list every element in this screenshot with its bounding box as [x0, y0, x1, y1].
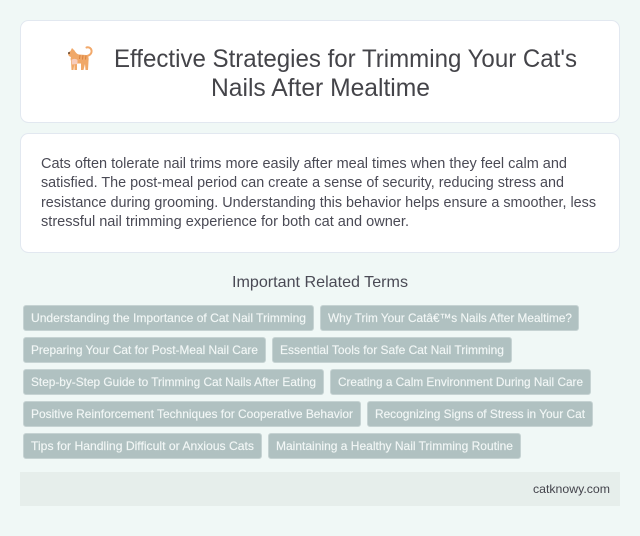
panel: introduction text: stressful nail trimming experience for both cat and owner. — [41, 214, 409, 230]
title: Effective Strategies for Trimming Your Cat's — [114, 45, 577, 73]
tag — [24, 338, 266, 362]
tag — [24, 402, 360, 426]
tag: Recognizing Signs of Stress in Your Cat — [375, 407, 586, 421]
tag — [330, 370, 590, 394]
heading: related terms: Important Related Terms — [232, 274, 408, 291]
tag — [320, 306, 578, 330]
tag — [24, 434, 262, 458]
tag — [272, 338, 512, 362]
tag: Why Trim Your Catâ€™s Nails After Mealtime? — [328, 311, 572, 325]
tag: Step-by-Step Guide to Trimming Cat Nails After Eating — [31, 375, 316, 389]
footer: catknowy.com — [533, 482, 610, 496]
tag: Positive Reinforcement Techniques for Cooperative Behavior — [31, 407, 353, 421]
panel: introduction text: satisfied. The post-meal period can create a sense of security, reducing stress and — [41, 175, 564, 191]
tag: Understanding the Importance of Cat Nail Trimming — [31, 311, 306, 325]
tag: Tips for Handling Difficult or Anxious Cats — [31, 439, 254, 453]
panel: introduction text: resistance during grooming. Understanding this behavior helps ensure a smoother, less — [41, 195, 596, 211]
title — [114, 45, 577, 102]
icon: cat emoji — [68, 47, 92, 70]
panel: title card — [20, 20, 620, 122]
tag — [368, 402, 592, 426]
footer — [20, 472, 620, 506]
panel: introduction text — [20, 134, 620, 252]
title: Nails After Mealtime — [211, 74, 430, 102]
tag: Creating a Calm Environment During Nail Care — [338, 375, 583, 389]
tag — [268, 434, 520, 458]
tag list — [24, 306, 592, 458]
tag: Essential Tools for Safe Cat Nail Trimming — [280, 343, 504, 357]
tag: Preparing Your Cat for Post-Meal Nail Care — [31, 343, 258, 357]
tag — [24, 370, 324, 394]
tag — [24, 306, 314, 330]
tag: Maintaining a Healthy Nail Trimming Routine — [276, 439, 513, 453]
panel: introduction text: Cats often tolerate nail trims more easily after meal times when they feel calm and — [41, 156, 567, 172]
